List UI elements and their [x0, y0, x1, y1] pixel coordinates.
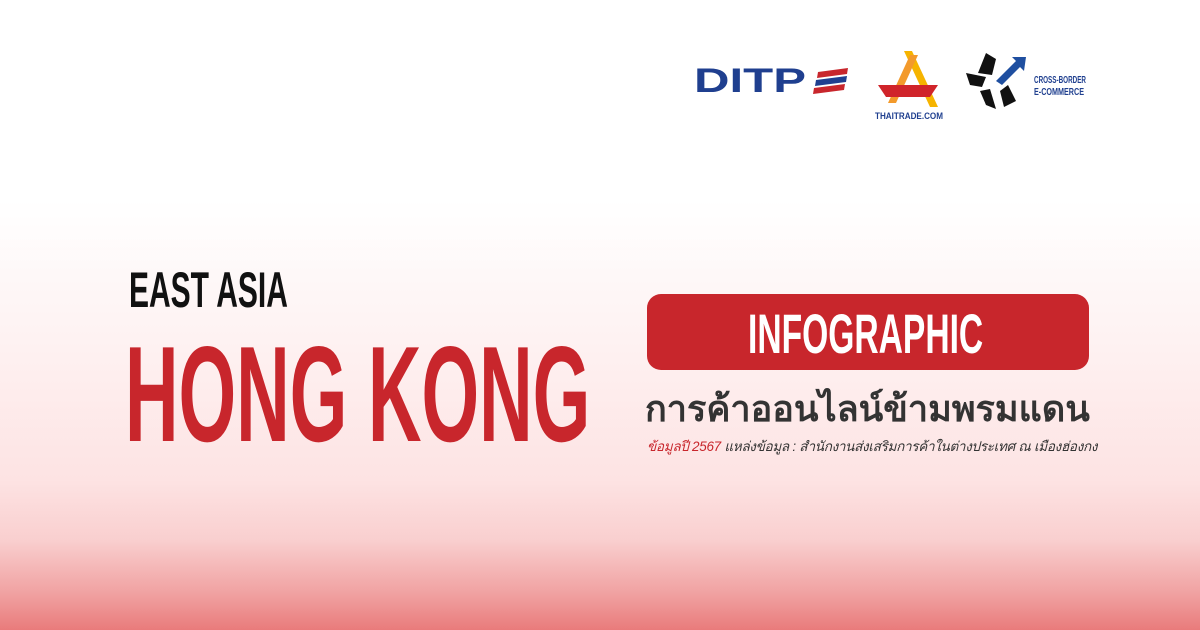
source note: ข้อมูลปี 2567 แหล่งข้อมูล : สำนักงานส่งเสริมการค้าในต่างประเทศ ณ เมืองฮ่องกง: [647, 439, 1097, 454]
logo: thaitrade: THAITRADE.COM: [875, 111, 943, 121]
logo: DITP: DITP: [694, 62, 806, 100]
logo: DITP: [694, 62, 848, 100]
heading: HONG KONG: HONG KONG: [125, 318, 590, 470]
logo: cross-border e-commerce: [966, 53, 1086, 109]
logo: thaitrade: [875, 51, 943, 121]
badge: INFOGRAPHIC: INFOGRAPHIC: [748, 302, 983, 365]
logos: [694, 51, 1086, 121]
badge: INFOGRAPHIC: [647, 294, 1089, 370]
subtitle thai: การค้าออนไลน์ข้ามพรมแดน: [645, 388, 1090, 429]
heading: EAST ASIA: EAST ASIA: [129, 262, 288, 318]
